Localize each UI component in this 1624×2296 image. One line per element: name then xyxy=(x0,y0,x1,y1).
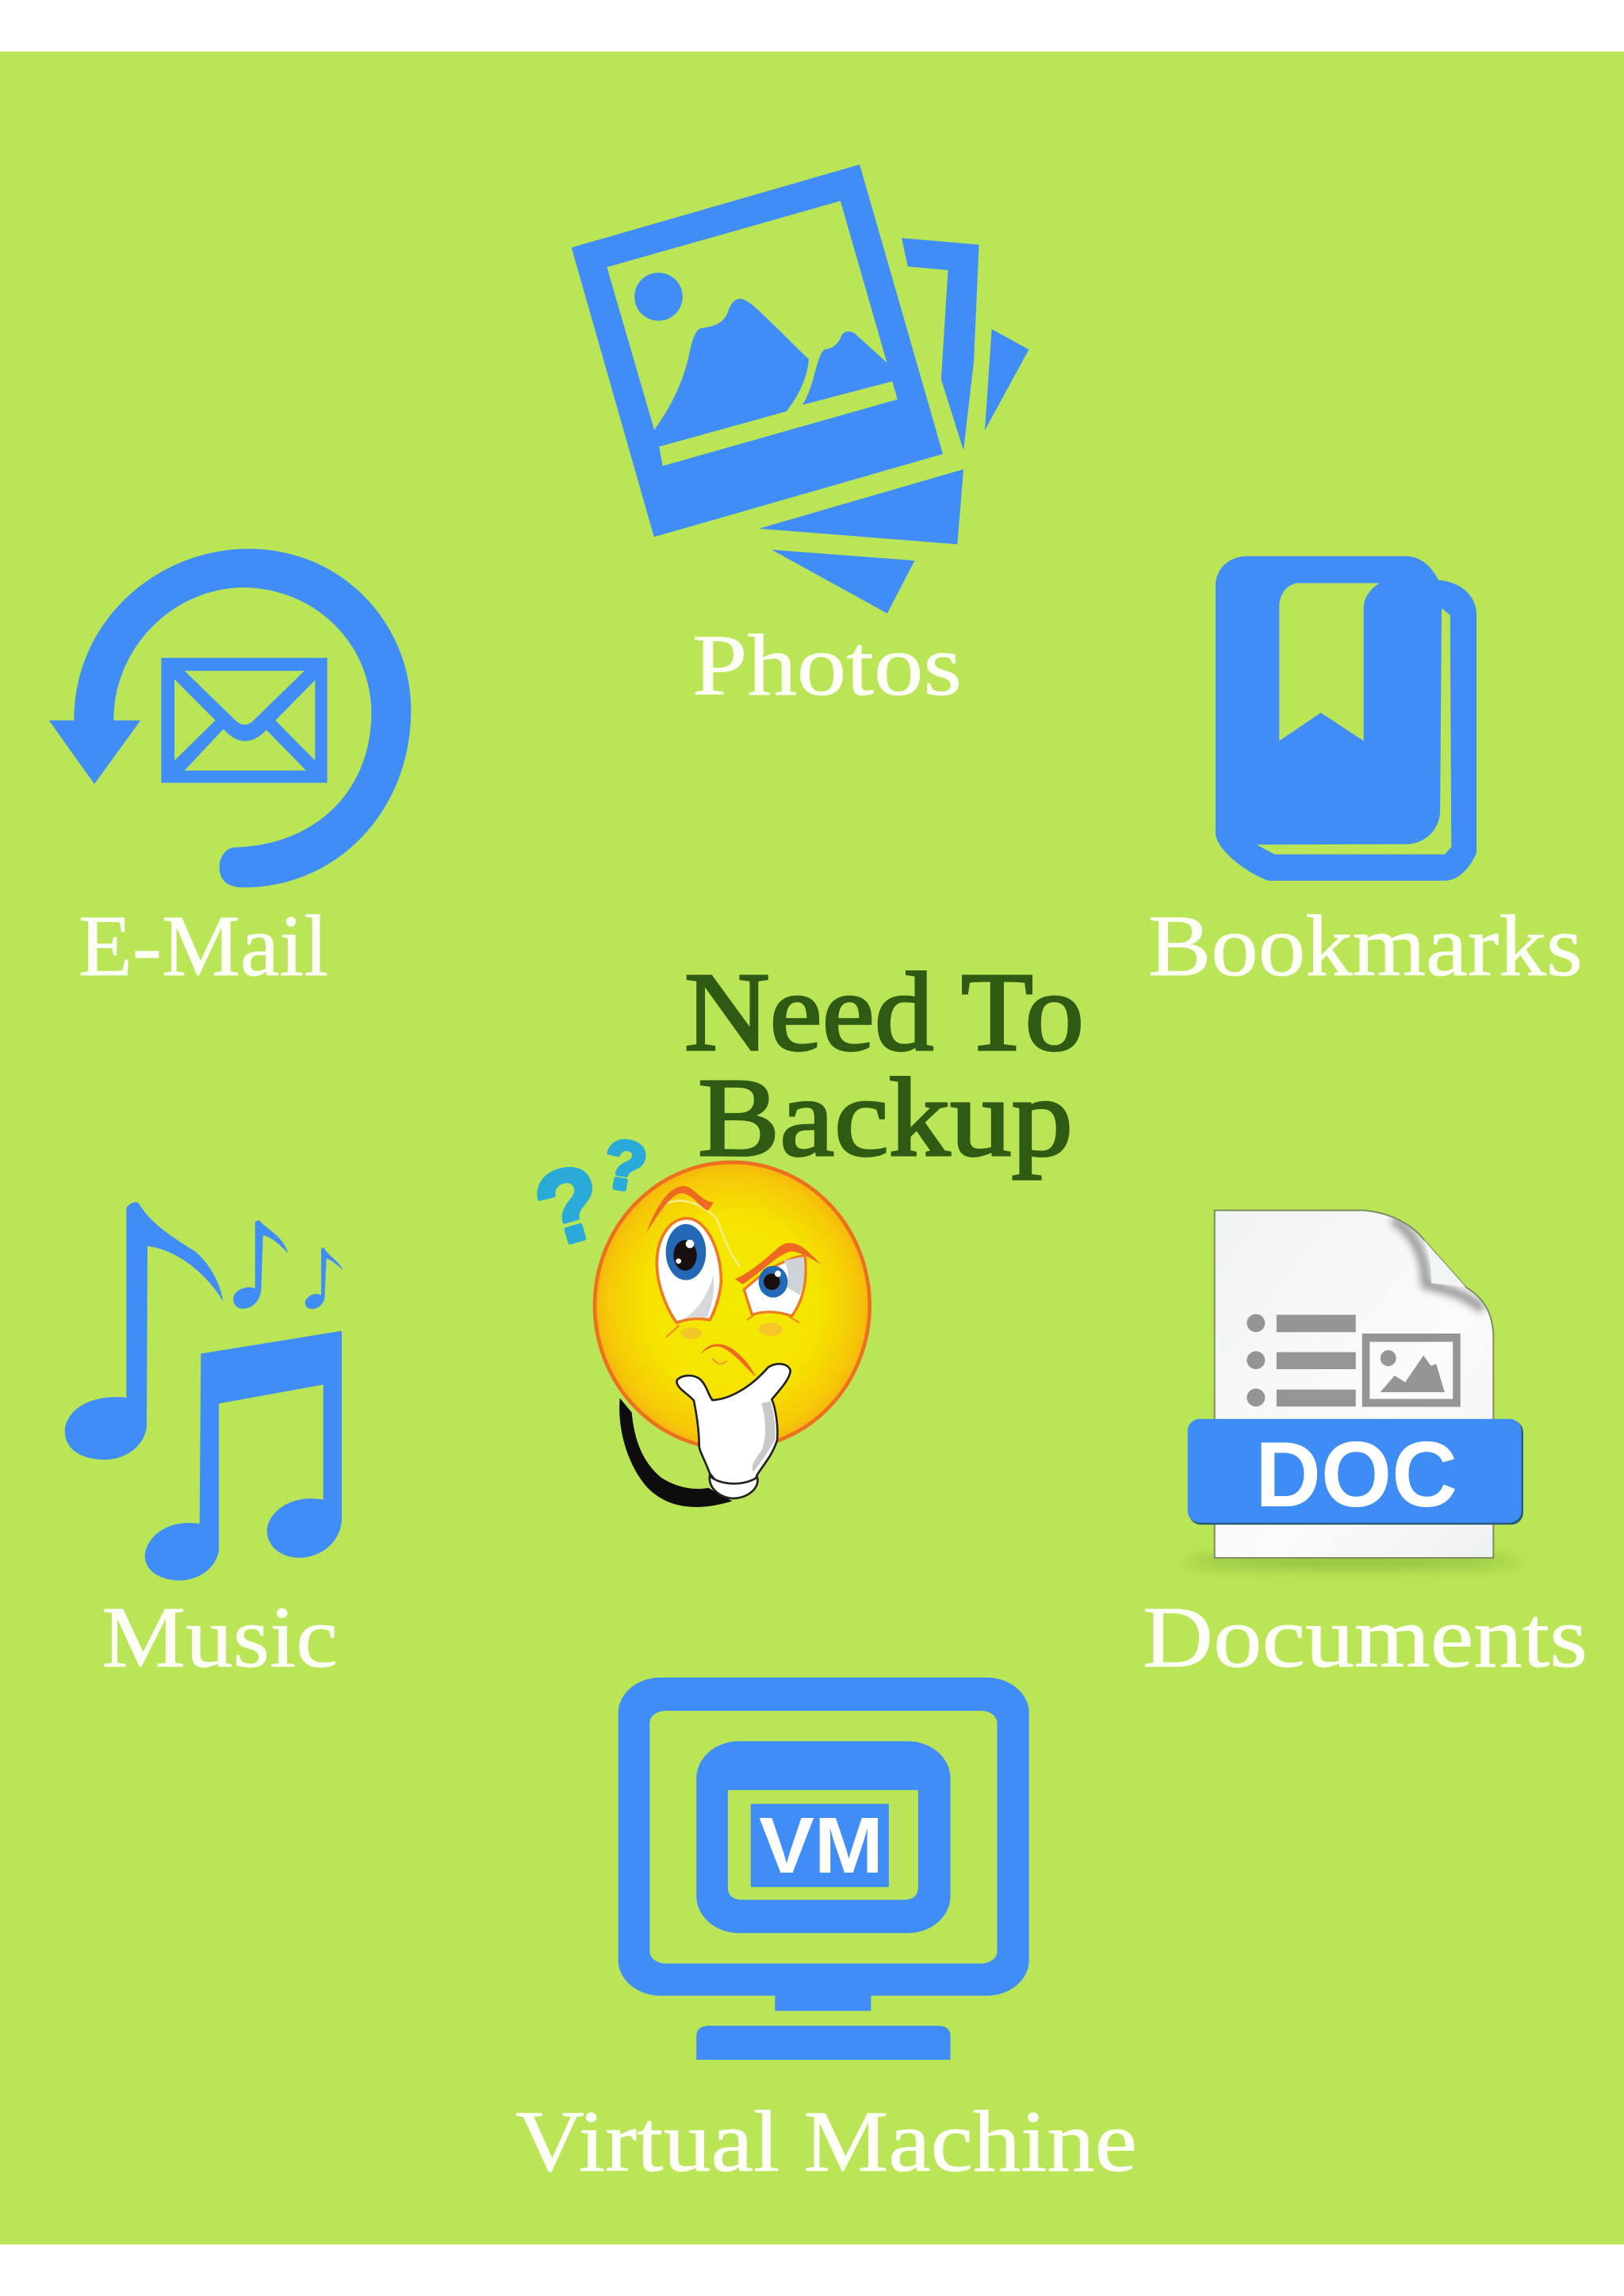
icon: DOC banner xyxy=(1188,1419,1523,1525)
label: VM text: VM xyxy=(759,1801,883,1890)
title: Need To Backup: Backup xyxy=(698,1054,1073,1180)
label: Music: Music xyxy=(102,1589,338,1686)
label: Virtual Machine: Virtual Machine xyxy=(515,2093,1137,2190)
icon: question marks: ? xyxy=(597,1125,652,1207)
icon: gloved hand xyxy=(676,1364,791,1498)
icon: question marks: ? xyxy=(523,1141,615,1270)
icon: folded page xyxy=(1215,1211,1493,1558)
icon: DOC document xyxy=(1184,1211,1523,1567)
title: Need To Backup: Need To xyxy=(684,949,1084,1074)
icon: thinking emoji xyxy=(523,1125,870,1507)
icon: page contents xyxy=(1247,1314,1461,1407)
label: Documents: Documents xyxy=(1143,1589,1588,1686)
icon: bookmarks book xyxy=(1216,556,1477,881)
label: Photos: Photos xyxy=(692,617,962,714)
title: Need To Backup xyxy=(684,949,1084,1180)
icon: question marks xyxy=(523,1125,652,1270)
label: DOC badge text: DOC xyxy=(1255,1422,1457,1526)
label: Bookmarks: Bookmarks xyxy=(1148,897,1583,994)
icon: music notes xyxy=(65,1202,343,1581)
icon: photos xyxy=(572,165,1028,614)
icon: virtual machine monitor xyxy=(619,1678,1029,2060)
label: E-Mail: E-Mail xyxy=(79,897,328,994)
icon: e-mail backup arrow xyxy=(49,549,411,887)
